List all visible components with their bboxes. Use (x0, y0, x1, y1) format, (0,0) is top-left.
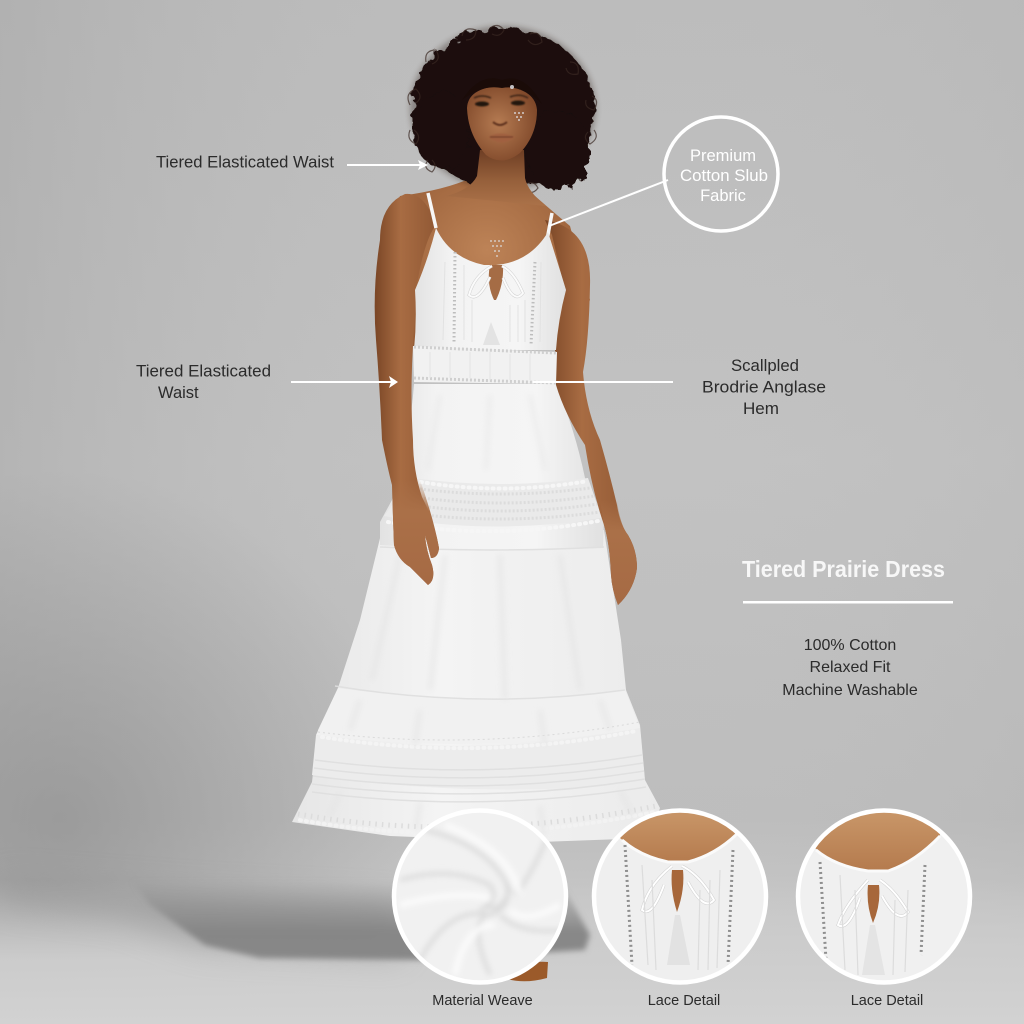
label: hem: Brodrie Anglase (702, 378, 826, 396)
label: hem: Hem (743, 400, 779, 418)
detail circle: lace detail two (796, 808, 972, 985)
upper skirt tier (380, 384, 604, 550)
right hand shading (600, 500, 637, 605)
callout line: fabric circle (549, 180, 668, 226)
callout line: hem (533, 381, 673, 383)
right arm (545, 220, 637, 605)
caption: material weave: Material Weave (432, 993, 533, 1009)
product title: Tiered Prairie Dress (742, 556, 945, 582)
caption: lace detail two: Lace Detail (851, 993, 923, 1009)
callout circle: premium fabric (664, 117, 778, 231)
bodice (414, 193, 566, 350)
callout circle: premium fabric: Fabric (700, 187, 746, 205)
label: hem: Scallpled (731, 357, 799, 375)
product specs: Machine Washable (782, 682, 918, 699)
neck (446, 150, 546, 206)
product specs (782, 637, 918, 699)
cheek sparkle (510, 85, 524, 121)
callout circle: premium fabric: Cotton Slub (680, 167, 768, 185)
skirt lower tiers (292, 530, 660, 842)
label: tiered elasticated waist lower: Tiered Elasticated (136, 362, 271, 380)
foot and sandal (505, 962, 548, 981)
chest sparkle (490, 240, 504, 257)
label: hem (702, 357, 826, 418)
waistband (413, 346, 557, 384)
title divider (743, 601, 953, 604)
left hand shading (392, 480, 439, 585)
caption: lace detail one: Lace Detail (648, 993, 720, 1009)
label: tiered elasticated waist lower: Waist (158, 384, 199, 402)
callout circle: premium fabric: Premium (690, 147, 756, 165)
callout arrow: waist (291, 376, 398, 388)
neck tie and keyhole (469, 265, 523, 345)
floor shadow (0, 880, 590, 960)
model figure (292, 25, 660, 981)
callout arrow: upper left (347, 160, 428, 170)
detail circle: material weave (390, 805, 570, 990)
detail circle: lace detail one (590, 805, 770, 990)
face (462, 78, 542, 161)
hair (408, 25, 597, 193)
label: tiered elasticated waist lower (136, 362, 271, 402)
product specs: 100% Cotton (804, 637, 896, 654)
left arm (375, 194, 439, 585)
label: tiered elasticated waist upper: Tiered Elasticated Waist (156, 154, 334, 172)
product specs: Relaxed Fit (810, 659, 891, 676)
neck and chest (384, 150, 590, 350)
